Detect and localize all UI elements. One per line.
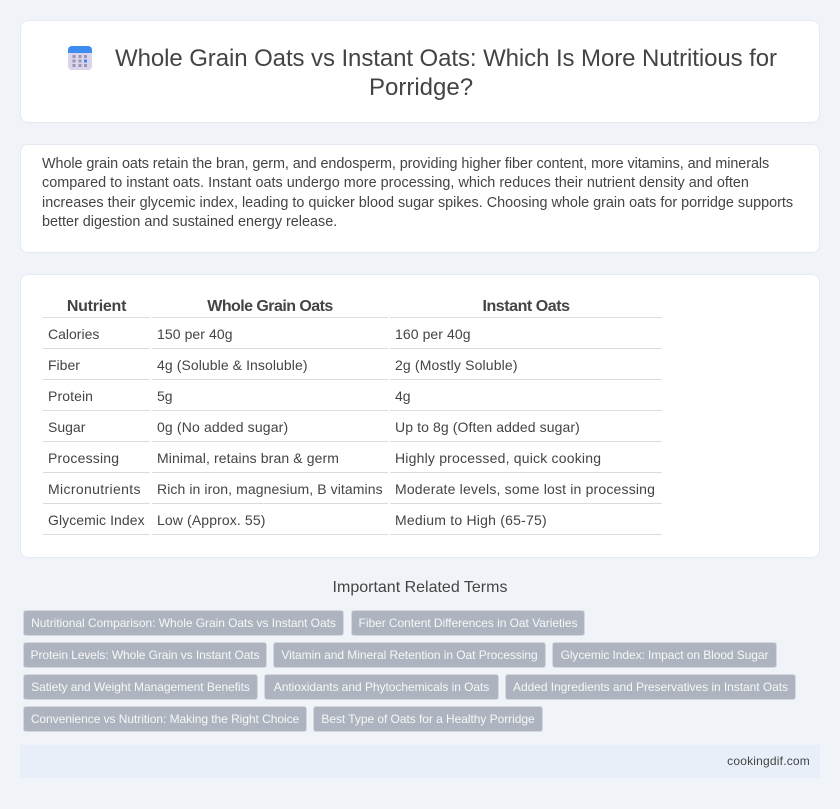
header panel <box>20 20 820 123</box>
comparison table: Processing <box>48 450 119 466</box>
header panel: Porridge? <box>369 74 473 101</box>
related term tags: Protein Levels: Whole Grain vs Instant Oats <box>31 648 259 662</box>
comparison table: Glycemic Index <box>48 512 145 528</box>
comparison table: Micronutrients <box>48 481 141 497</box>
intro paragraph: better digestion and sustained energy release. <box>42 214 337 230</box>
related term tags: Added Ingredients and Preservatives in Instant Oats <box>513 680 788 694</box>
intro paragraph <box>42 156 793 230</box>
comparison table: Whole Grain Oats <box>207 298 333 315</box>
intro text panel <box>20 144 820 253</box>
source credit: cookingdif.com <box>727 754 810 768</box>
related term tags: Antioxidants and Phytochemicals in Oats <box>274 680 489 694</box>
footer <box>20 745 820 778</box>
comparison table: Medium to High (65-75) <box>395 512 547 528</box>
icon: calendar <box>68 46 92 70</box>
comparison table <box>43 298 662 535</box>
comparison table: 4g <box>395 388 411 404</box>
related term tags: Best Type of Oats for a Healthy Porridge <box>321 712 535 726</box>
comparison table: Instant Oats <box>482 298 570 315</box>
comparison table: 160 per 40g <box>395 326 471 342</box>
comparison table: Rich in iron, magnesium, B vitamins <box>157 481 383 497</box>
comparison table: 4g (Soluble & Insoluble) <box>157 357 308 373</box>
related term tags: Nutritional Comparison: Whole Grain Oats vs Instant Oats <box>31 616 336 630</box>
related term tags: Satiety and Weight Management Benefits <box>31 680 250 694</box>
intro paragraph: increases their glycemic index, leading to quicker blood sugar spikes. Choosing whole grain oats for porridge supports <box>42 195 793 211</box>
comparison table: Sugar <box>48 419 85 435</box>
related term tags: Glycemic Index: Impact on Blood Sugar <box>561 648 768 662</box>
comparison table: Up to 8g (Often added sugar) <box>395 419 580 435</box>
comparison table: Protein <box>48 388 93 404</box>
comparison table: Highly processed, quick cooking <box>395 450 601 466</box>
related terms heading: Important Related Terms <box>333 579 507 596</box>
comparison table: 2g (Mostly Soluble) <box>395 357 518 373</box>
related term tags: Fiber Content Differences in Oat Varieties <box>359 616 577 630</box>
related term tags: Vitamin and Mineral Retention in Oat Processing <box>281 648 538 662</box>
intro paragraph: compared to instant oats. Instant oats undergo more processing, which reduces their nutrient density and often <box>42 175 749 191</box>
comparison table: Minimal, retains bran & germ <box>157 450 339 466</box>
comparison table: Moderate levels, some lost in processing <box>395 481 655 497</box>
comparison table: Nutrient <box>67 298 126 315</box>
related term tags: Convenience vs Nutrition: Making the Right Choice <box>31 712 299 726</box>
comparison table: Low (Approx. 55) <box>157 512 266 528</box>
title: Whole Grain Oats vs Instant Oats: Which Is More Nutritious for <box>115 45 777 72</box>
related term tags <box>23 610 796 732</box>
comparison table: 0g (No added sugar) <box>157 419 288 435</box>
comparison table: 5g <box>157 388 173 404</box>
comparison table: Fiber <box>48 357 80 373</box>
comparison table panel <box>20 274 820 558</box>
comparison table: Calories <box>48 326 99 342</box>
comparison table: 150 per 40g <box>157 326 233 342</box>
intro paragraph: Whole grain oats retain the bran, germ, and endosperm, providing higher fiber content, more vitamins, and minerals <box>42 156 769 172</box>
